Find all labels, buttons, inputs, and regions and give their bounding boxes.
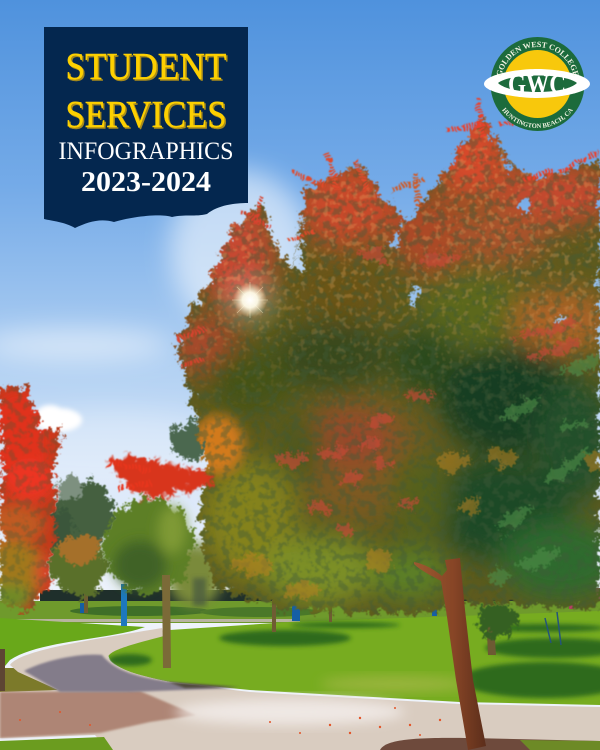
- small tree trunks: [84, 590, 496, 655]
- colour fields: [169, 110, 600, 604]
- sunlit walkway: [175, 699, 405, 725]
- sun flare: [210, 260, 290, 340]
- logo arc text top: GOLDEN WEST COLLEGE: [496, 42, 579, 76]
- banner shape: [44, 27, 248, 228]
- left lawn: [0, 618, 145, 672]
- fallen leaves: [19, 707, 441, 736]
- title banner: [44, 27, 248, 228]
- heading: student: STUDENT: [67, 48, 228, 90]
- orange patch at lower left of canopy: [192, 415, 244, 475]
- wispy clouds: [0, 170, 310, 490]
- leaf texture warm: [177, 118, 600, 408]
- red runner and swing frame: [545, 598, 574, 645]
- lawn shadows: [108, 622, 600, 698]
- right lawn: [108, 611, 600, 705]
- blue lamp post: [121, 584, 127, 626]
- bottom left grass: [0, 737, 113, 750]
- small tree foliage at right: [478, 604, 518, 636]
- leaf texture dark: [160, 90, 600, 620]
- far lawn and buildings: [0, 588, 600, 623]
- hazy olive gap behind young tree: [167, 543, 223, 607]
- main trunk: [414, 558, 486, 750]
- dark post shape in gap: [193, 578, 206, 606]
- college logo: [484, 37, 590, 131]
- left red tree: [0, 380, 70, 615]
- sunlit lawn patch: [320, 676, 470, 692]
- walkway: [0, 628, 600, 750]
- brick plaza: [0, 691, 196, 738]
- cloud puff at left: [34, 405, 82, 432]
- orange leaf clusters: [230, 449, 600, 598]
- heading: services: SERVICES: [67, 96, 228, 138]
- mulch bed: [380, 738, 600, 750]
- heading: student: STUDENT: [66, 46, 226, 88]
- green young tree: [104, 498, 192, 594]
- subheading: INFOGRAPHICS: [58, 138, 234, 165]
- heading: services: SERVICES: [66, 94, 226, 136]
- green fern clusters: [488, 351, 600, 583]
- logo initials: GWC: [508, 69, 566, 99]
- red leaf clusters: [276, 249, 585, 536]
- main tree canopy: [160, 90, 600, 620]
- blue trash cans: [80, 600, 437, 621]
- logo lens: [484, 69, 590, 98]
- orange-green small tree: [51, 535, 107, 597]
- walkway shadow: [24, 655, 235, 692]
- red branch and leaf sprigs: [107, 98, 598, 500]
- left red branch: [107, 456, 215, 500]
- mulch patch at left: [0, 668, 58, 694]
- logo arc text bottom: HUNTINGTON BEACH, CA: [502, 107, 573, 128]
- background trees: [48, 420, 207, 561]
- year range: 2023-2024: [81, 167, 211, 198]
- young tree trunk: [162, 575, 171, 668]
- bin post at left edge: [0, 649, 5, 691]
